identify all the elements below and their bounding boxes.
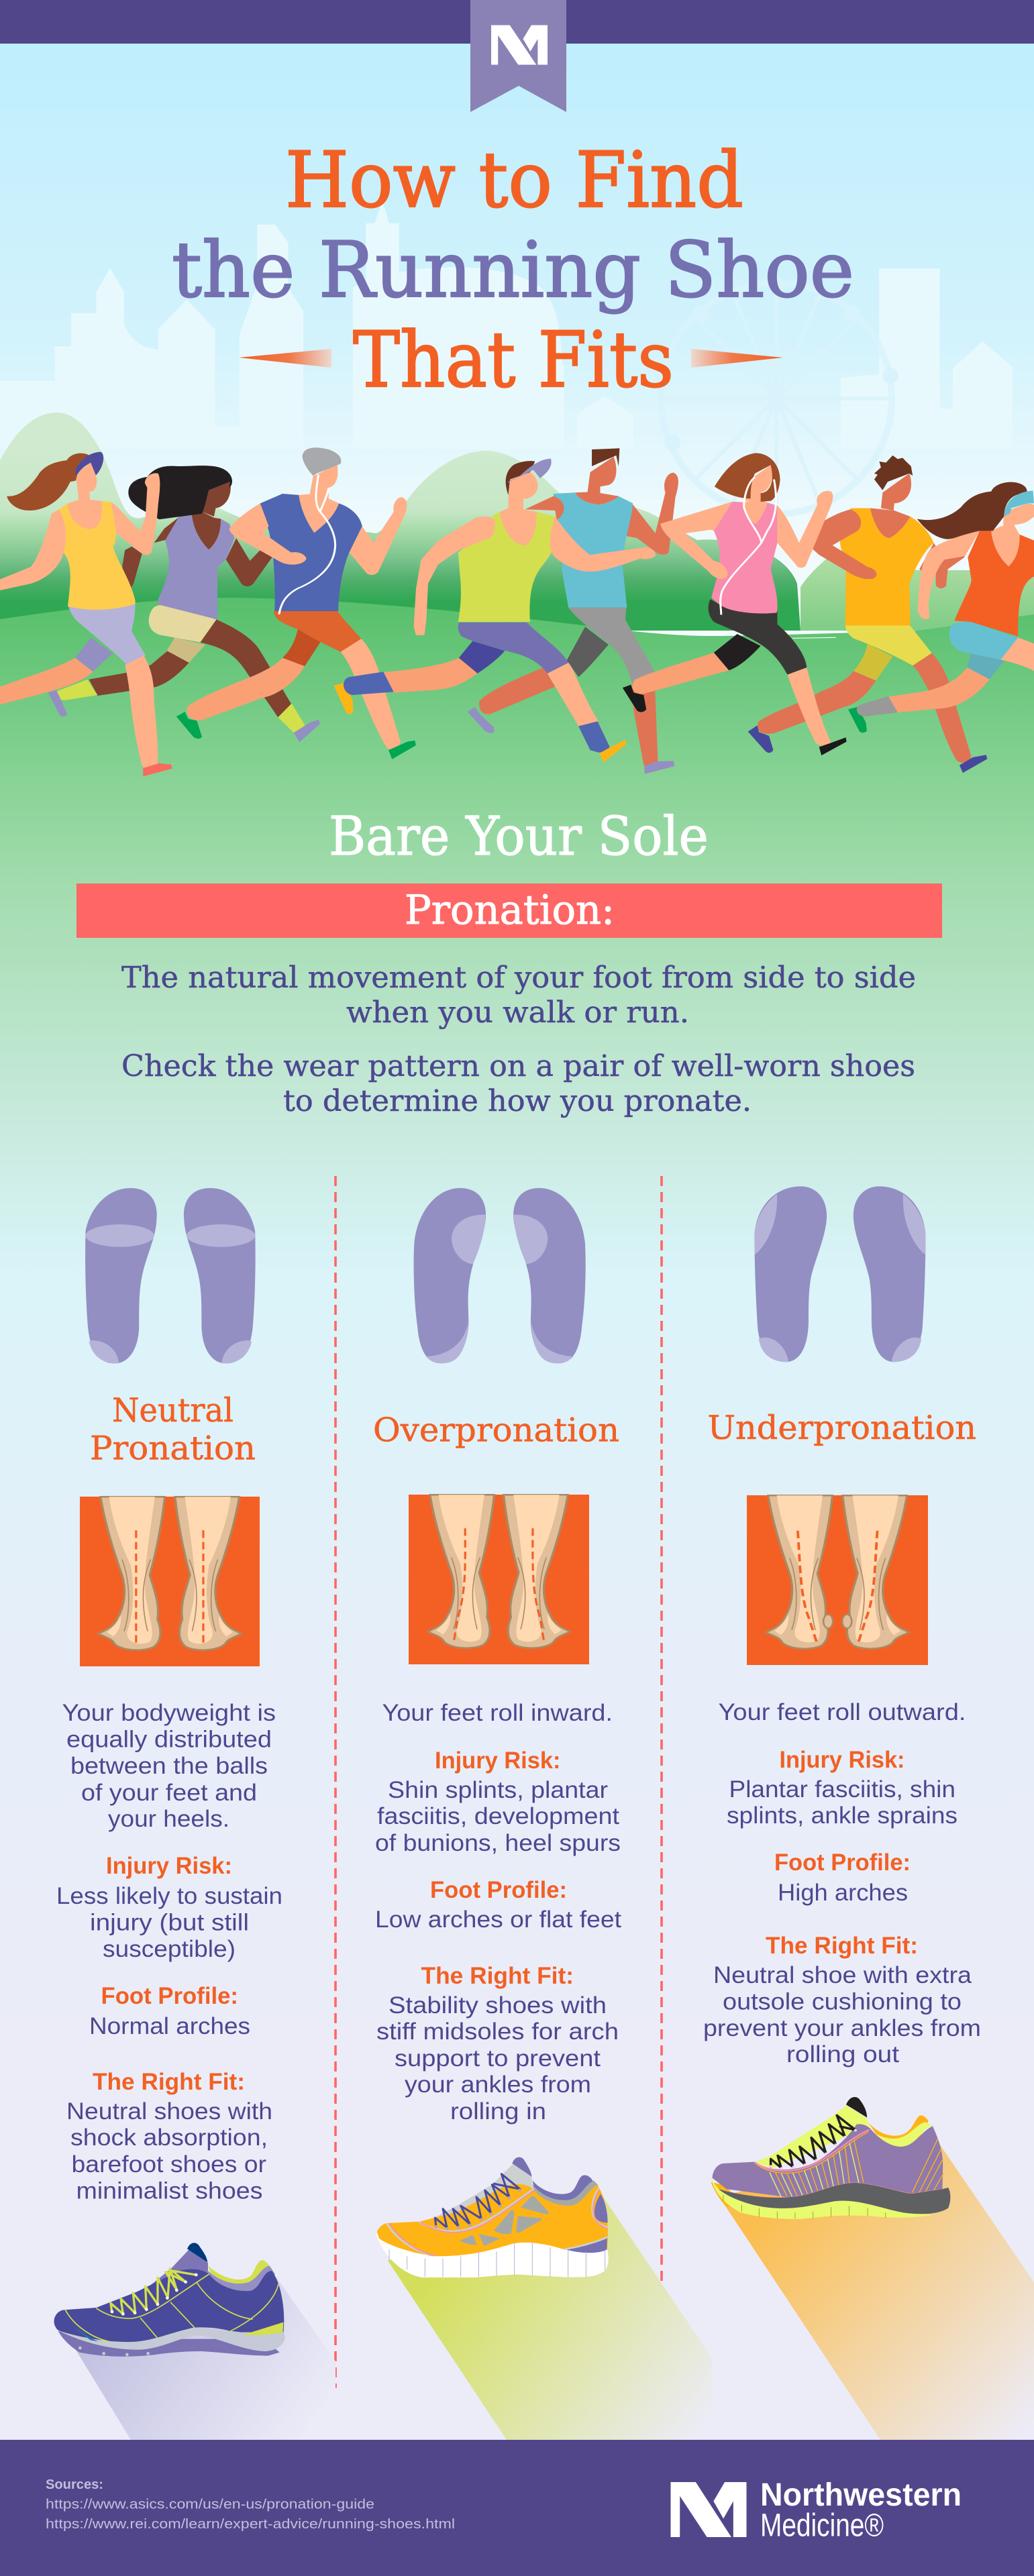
heading: overpronation: Overpronation [373, 1411, 619, 1449]
shoe shadow: overpronation [388, 2197, 712, 2440]
title: the Running Shoe [172, 225, 854, 315]
runner 1 yellow top [0, 452, 172, 776]
title [172, 136, 854, 405]
logo: Northwestern Medicine [671, 2477, 962, 2544]
text: neutral description: equally distributed [66, 1727, 272, 1752]
icon: overpronation soles [414, 1188, 586, 1363]
text: underpronation description: The Right Fit: [766, 1933, 918, 1959]
icon: overpronation shoe [376, 2157, 609, 2277]
footer [0, 2440, 1034, 2576]
icon: neutral soles [85, 1188, 256, 1363]
text: underpronation description: Your feet roll outward. [718, 1699, 966, 1725]
banner: pronation: Pronation: [405, 887, 615, 934]
icon: underpronation shoe [711, 2097, 950, 2219]
text: neutral description: Less likely to sustain [56, 1883, 282, 1909]
panel: underpronation [703, 1186, 981, 2068]
panel: neutral pronation [56, 1188, 282, 2204]
text: overpronation description: your ankles from [405, 2072, 591, 2098]
text: neutral description: shock absorption, [70, 2125, 268, 2151]
text: overpronation description: Low arches or flat feet [375, 1907, 621, 1933]
city skyline [0, 201, 1013, 449]
title: That Fits [353, 315, 674, 405]
icon: underpronation legs [747, 1495, 928, 1665]
text: neutral description: Your bodyweight is [62, 1700, 276, 1726]
text: neutral description: Injury Risk: [106, 1853, 232, 1879]
text: overpronation description: Foot Profile: [430, 1877, 567, 1903]
text: neutral description: your heels. [108, 1806, 229, 1832]
section heading: Bare Your Sole [329, 805, 709, 867]
runner 5 teal top [468, 448, 678, 774]
text: overpronation description: support to prevent [395, 2045, 601, 2072]
banner: pronation [76, 883, 942, 938]
foreground ground [0, 598, 1034, 2442]
column dividers [335, 1176, 662, 2401]
text: neutral description: of your feet and [81, 1780, 257, 1806]
icon: neutral shoe [54, 2243, 285, 2357]
heading: neutral pronation: Pronation [90, 1429, 256, 1468]
icon: underpronation soles [754, 1186, 925, 1362]
intro text [121, 961, 916, 1118]
text: overpronation description: of bunions, heel spurs [375, 1830, 621, 1856]
title: How to Find [285, 136, 743, 225]
runner 3 blue top [176, 447, 416, 759]
text: neutral description: barefoot shoes or [71, 2151, 266, 2178]
text: underpronation description: outsole cushioning to [723, 1988, 962, 2015]
runner 2 purple top [48, 466, 320, 742]
runner 4 green top [344, 459, 656, 763]
text: underpronation description: Plantar fasciitis, shin [729, 1776, 955, 1803]
sources text: https://www.asics.com/us/en-us/pronation-guide [46, 2497, 374, 2512]
text: overpronation description: Your feet roll inward. [382, 1700, 613, 1726]
runner 6 pink top [623, 453, 847, 755]
logo: Northwestern Medicine: Northwestern [760, 2477, 962, 2513]
runners illustration [0, 447, 1034, 776]
panel: overpronation [373, 1188, 621, 2125]
sources text: Sources: [46, 2477, 103, 2492]
text: underpronation description: Neutral shoe with extra [713, 1962, 972, 1988]
heading: neutral pronation: Neutral [112, 1391, 234, 1430]
icon: overpronation legs [409, 1495, 589, 1664]
text: underpronation description: rolling out [786, 2041, 899, 2068]
sources text [46, 2477, 455, 2532]
text: neutral description: Neutral shoes with [66, 2098, 272, 2125]
text: neutral description: susceptible) [103, 1936, 236, 1962]
text: underpronation description [703, 1699, 981, 2068]
shoe shadow: underpronation [719, 2140, 1034, 2440]
text: overpronation description: The Right Fit: [421, 1963, 574, 1989]
text: overpronation description: stiff midsoles for arch [376, 2019, 619, 2045]
text: overpronation description: Stability shoes with [389, 1992, 607, 2019]
ribbon with logo [470, 0, 566, 112]
intro text: to determine how you pronate. [283, 1084, 752, 1118]
heading: neutral pronation [90, 1391, 256, 1468]
text: neutral description: between the balls [70, 1753, 268, 1779]
text: overpronation description: rolling in [450, 2098, 546, 2125]
text: neutral description [56, 1700, 282, 2204]
shoe shadow: neutral [65, 2277, 335, 2440]
text: overpronation description: Injury Risk: [435, 1748, 561, 1774]
arrow left [239, 349, 331, 368]
runner 7 amber top [748, 455, 987, 773]
text: underpronation description: Injury Risk: [780, 1747, 904, 1773]
header bar [0, 0, 1034, 44]
text: neutral description: injury (but still [90, 1909, 249, 1936]
intro text: The natural movement of your foot from side to side [121, 961, 916, 995]
text: overpronation description: fasciitis, development [377, 1803, 619, 1829]
text: neutral description: Foot Profile: [101, 1983, 238, 2009]
text: overpronation description: Shin splints, plantar [388, 1777, 608, 1803]
sources text: https://www.rei.com/learn/expert-advice/running-shoes.html [46, 2517, 455, 2532]
intro text: Check the wear pattern on a pair of well-worn shoes [121, 1049, 915, 1083]
ferris wheel [654, 276, 898, 514]
text: underpronation description: splints, ankle sprains [727, 1803, 958, 1829]
text: underpronation description: prevent your ankles from [703, 2015, 981, 2041]
text: neutral description: Normal arches [89, 2013, 250, 2039]
text: neutral description: minimalist shoes [76, 2178, 263, 2204]
heading: underpronation: Underpronation [707, 1409, 976, 1447]
runner 8 orange top [857, 482, 1034, 716]
text: neutral description: The Right Fit: [93, 2069, 245, 2095]
arrow right [691, 349, 783, 368]
text: overpronation description [375, 1700, 621, 2125]
logo: Northwestern Medicine: Medicine® [760, 2508, 884, 2544]
background hills [0, 413, 1034, 631]
background sky [0, 0, 1034, 651]
intro text: when you walk or run. [346, 996, 689, 1030]
icon: neutral legs [80, 1497, 260, 1666]
text: underpronation description: Foot Profile: [774, 1849, 911, 1876]
text: underpronation description: High arches [778, 1880, 908, 1906]
